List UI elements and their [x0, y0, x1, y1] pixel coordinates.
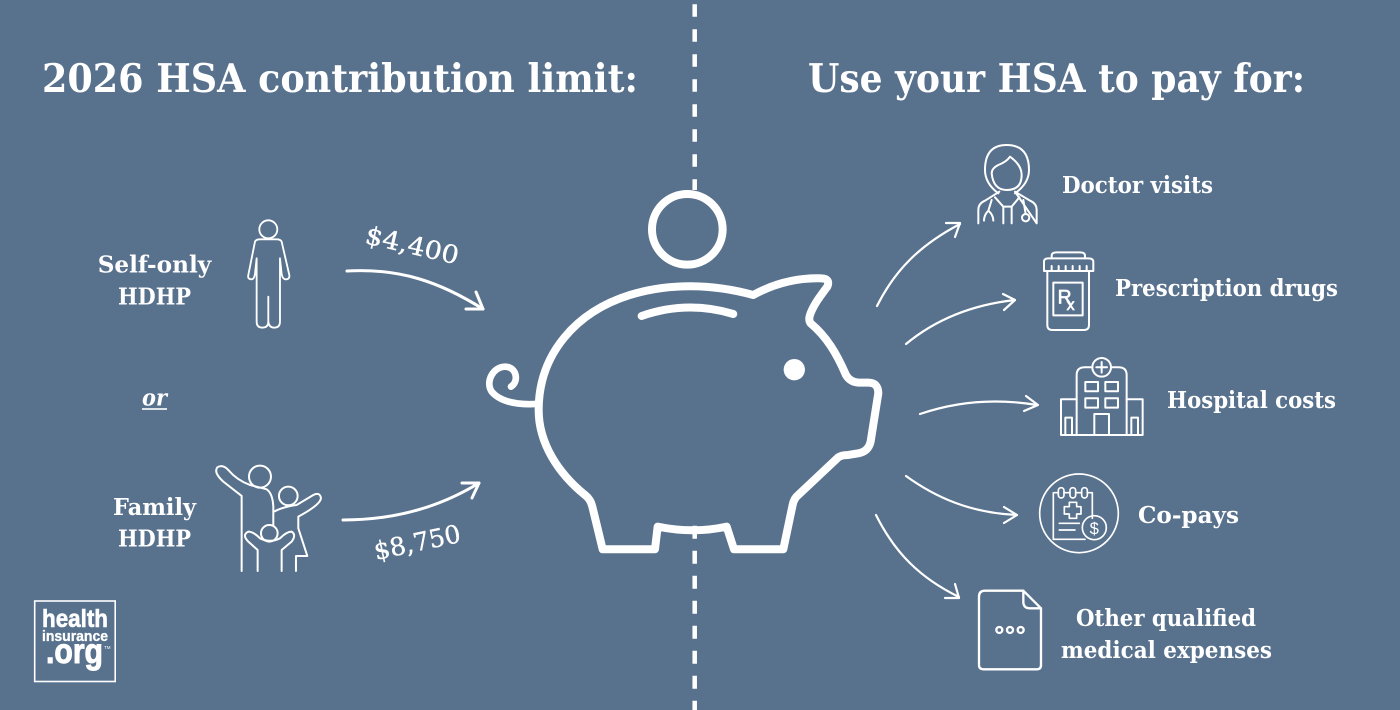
coin slot — [642, 307, 733, 316]
coin — [652, 194, 723, 265]
label: other qualified medical expenses — [1061, 604, 1272, 664]
logo: healthinsurance.org — [35, 601, 115, 682]
label: hospital costs: Hospital costs — [1167, 386, 1336, 414]
icon: family — [216, 466, 321, 571]
label: self-only HDHP: Self-only — [98, 251, 213, 279]
arrow: to other expenses — [876, 515, 959, 598]
label: family HDHP: Family — [113, 493, 197, 521]
label: or: or — [142, 384, 168, 412]
heading: contribution limit: 2026 HSA contribution limit: — [42, 56, 638, 102]
icon: single person — [248, 220, 289, 328]
heading: use your HSA: Use your HSA to pay for: — [808, 56, 1305, 102]
logo: healthinsurance.org: TM — [104, 645, 111, 650]
eye — [784, 359, 805, 380]
logo: healthinsurance.org: insurance — [42, 629, 108, 645]
icon: prescription bottle — [1044, 252, 1093, 330]
label: self-only HDHP: HDHP — [118, 283, 191, 311]
logo: healthinsurance.org: health — [42, 605, 108, 633]
label: doctor visits: Doctor visits — [1062, 171, 1213, 199]
icon: document — [979, 591, 1041, 669]
icon: doctor — [978, 145, 1037, 223]
arrow: family to piggy bank — [343, 483, 479, 520]
pig body — [539, 278, 878, 549]
icon: prescription bottle: R — [1058, 287, 1072, 308]
tail — [489, 367, 537, 404]
icon: prescription bottle: x — [1067, 297, 1075, 314]
label: family HDHP: HDHP — [118, 525, 191, 553]
icon: co-pay calendar: $ — [1090, 519, 1099, 538]
arrow: to doctor visits — [877, 223, 960, 306]
arrow: to prescription drugs — [906, 294, 1015, 344]
logo: healthinsurance.org: .org — [46, 632, 103, 671]
label: self-only HDHP — [98, 251, 213, 311]
label: prescription drugs: Prescription drugs — [1115, 274, 1338, 302]
amount: $4,400: $4,400 — [363, 221, 462, 270]
label: family HDHP — [113, 493, 197, 553]
piggy bank — [489, 194, 878, 549]
label: other qualified medical expenses: Other qualified — [1076, 604, 1256, 632]
label: co-pays: Co-pays — [1138, 501, 1239, 529]
arrow: to hospital costs — [920, 396, 1038, 414]
label: other qualified medical expenses: medical expenses — [1061, 636, 1272, 664]
icon: hospital — [1061, 358, 1143, 435]
arrow: self-only to piggy bank — [347, 271, 483, 309]
arrow: to co-pays — [906, 476, 1017, 523]
icon: co-pay calendar — [1040, 474, 1118, 553]
amount: $8,750: $8,750 — [371, 519, 463, 566]
